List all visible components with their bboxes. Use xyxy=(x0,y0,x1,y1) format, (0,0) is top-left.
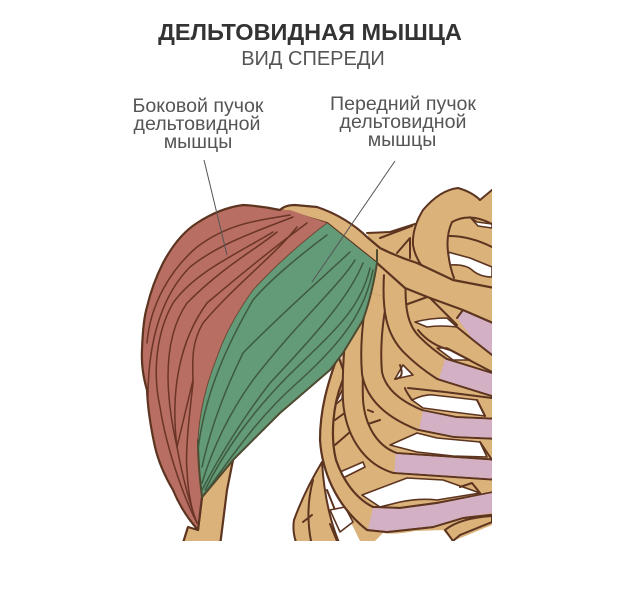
rib cage silhouette xyxy=(330,188,492,541)
lateral fibers xyxy=(147,215,307,523)
subtitle: ВИД СПЕРЕДИ xyxy=(241,48,385,70)
collarbone xyxy=(280,205,500,326)
humerus xyxy=(182,460,233,546)
title: ДЕЛЬТОВИДНАЯ МЫШЦА xyxy=(158,19,462,45)
deltoid muscle xyxy=(142,205,377,530)
label: anterior bundle xyxy=(330,93,476,151)
rib cage xyxy=(293,188,500,546)
lower rib lines xyxy=(303,480,337,541)
lateral outline xyxy=(142,205,280,530)
label: lateral bundle xyxy=(132,95,264,153)
lower left rib stub xyxy=(293,462,340,545)
anterior bundle (green) xyxy=(198,223,377,497)
rib 3 xyxy=(371,295,500,429)
lateral bundle (red) xyxy=(142,205,327,530)
gaps between ribs xyxy=(330,217,492,546)
leader line: anterior bundle xyxy=(312,161,395,282)
rib 2 xyxy=(395,275,500,387)
intercostal ties xyxy=(335,296,492,445)
anterior outline xyxy=(198,250,377,497)
rib 4 xyxy=(342,351,492,480)
label: lateral bundle: дельтовидной xyxy=(134,113,260,135)
bone outlines xyxy=(413,188,492,270)
label: anterior bundle: мышцы xyxy=(368,129,436,151)
leader line: lateral bundle xyxy=(204,160,227,255)
label: lateral bundle: Боковой пучок xyxy=(132,95,264,117)
costal cartilage xyxy=(368,310,500,531)
rib 5 xyxy=(320,355,500,532)
anterior fibers xyxy=(198,235,373,490)
label: anterior bundle: дельтовидной xyxy=(340,111,466,133)
label: anterior bundle: Передний пучок xyxy=(330,93,476,115)
label: lateral bundle: мышцы xyxy=(164,131,232,153)
boundary between bundles xyxy=(198,223,327,440)
